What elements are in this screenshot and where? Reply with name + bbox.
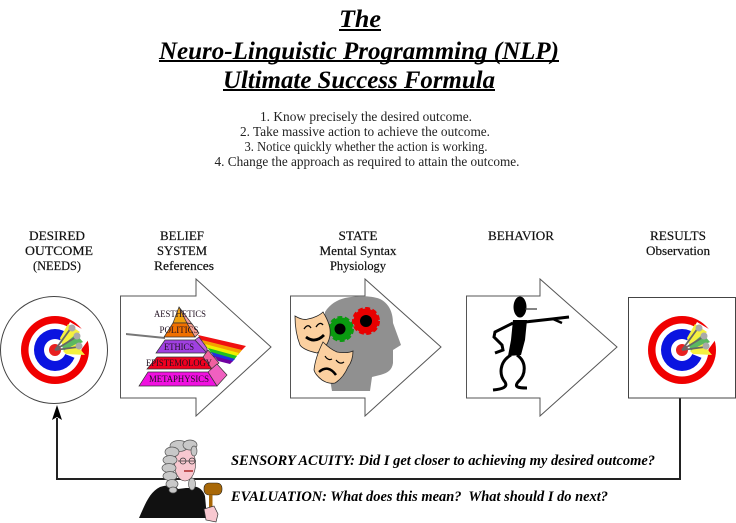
heading: desired outcome [25, 228, 93, 273]
heading: belief system: BELIEF [160, 228, 204, 243]
icon: red gear [353, 308, 379, 334]
heading: desired outcome: (NEEDS) [33, 258, 81, 273]
icon: sad mask [314, 342, 353, 383]
pyramid labels: AESTHETICS [154, 310, 206, 320]
heading: results: RESULTS [650, 228, 706, 243]
heading: desired outcome: DESIRED [29, 228, 85, 243]
desired outcome target [0, 296, 108, 404]
evaluation question: EVALUATION: What does this mean? What should I do next? [230, 489, 608, 505]
results box with target [628, 298, 736, 398]
heading: results [646, 228, 710, 258]
numbered steps: 3. Notice quickly whether the action is working. [244, 139, 488, 154]
heading: desired outcome: OUTCOME [25, 243, 93, 258]
icon: rainbow [198, 335, 246, 364]
icon: pointing stick figure [493, 296, 569, 390]
numbered steps: 4. Change the approach as required to attain the outcome. [214, 154, 520, 169]
icon: happy mask [295, 312, 330, 353]
title: The [339, 6, 381, 33]
feedback loop line with arrow [52, 398, 680, 479]
title: Neuro-Linguistic Programming (NLP) [158, 38, 559, 65]
heading: state: STATE [338, 228, 378, 243]
arrow: behavior [466, 279, 617, 416]
icon: prism beam [126, 333, 165, 339]
heading: state: Physiology [330, 258, 386, 273]
sensory acuity question: SENSORY ACUITY: Did I get closer to achieving my desired outcome? [231, 453, 655, 469]
pyramid [139, 307, 227, 386]
heading: state [320, 228, 397, 273]
icon: green gear [329, 317, 353, 341]
pyramid labels: ETHICS [164, 343, 194, 353]
numbered steps [214, 109, 520, 169]
title [158, 6, 559, 94]
pyramid labels: METAPHYSICS [149, 375, 209, 385]
arrow: state [290, 279, 441, 416]
icon: head silhouette [325, 296, 401, 391]
pyramid labels [146, 310, 212, 385]
heading: belief system [154, 228, 214, 273]
heading: results: Observation [646, 243, 710, 258]
title: Ultimate Success Formula [223, 67, 495, 94]
arrow: belief system [120, 279, 271, 416]
heading: behavior: BEHAVIOR [488, 228, 554, 243]
pyramid labels: POLITICS [160, 326, 198, 336]
heading: state: Mental Syntax [320, 243, 397, 258]
icon: judge with gavel [139, 440, 222, 522]
numbered steps: 1. Know precisely the desired outcome. [260, 109, 472, 124]
heading: belief system: References [154, 258, 214, 273]
heading: belief system: SYSTEM [157, 243, 207, 258]
pyramid labels: EPISTEMOLOGY [146, 359, 212, 369]
numbered steps: 2. Take massive action to achieve the outcome. [240, 124, 490, 139]
